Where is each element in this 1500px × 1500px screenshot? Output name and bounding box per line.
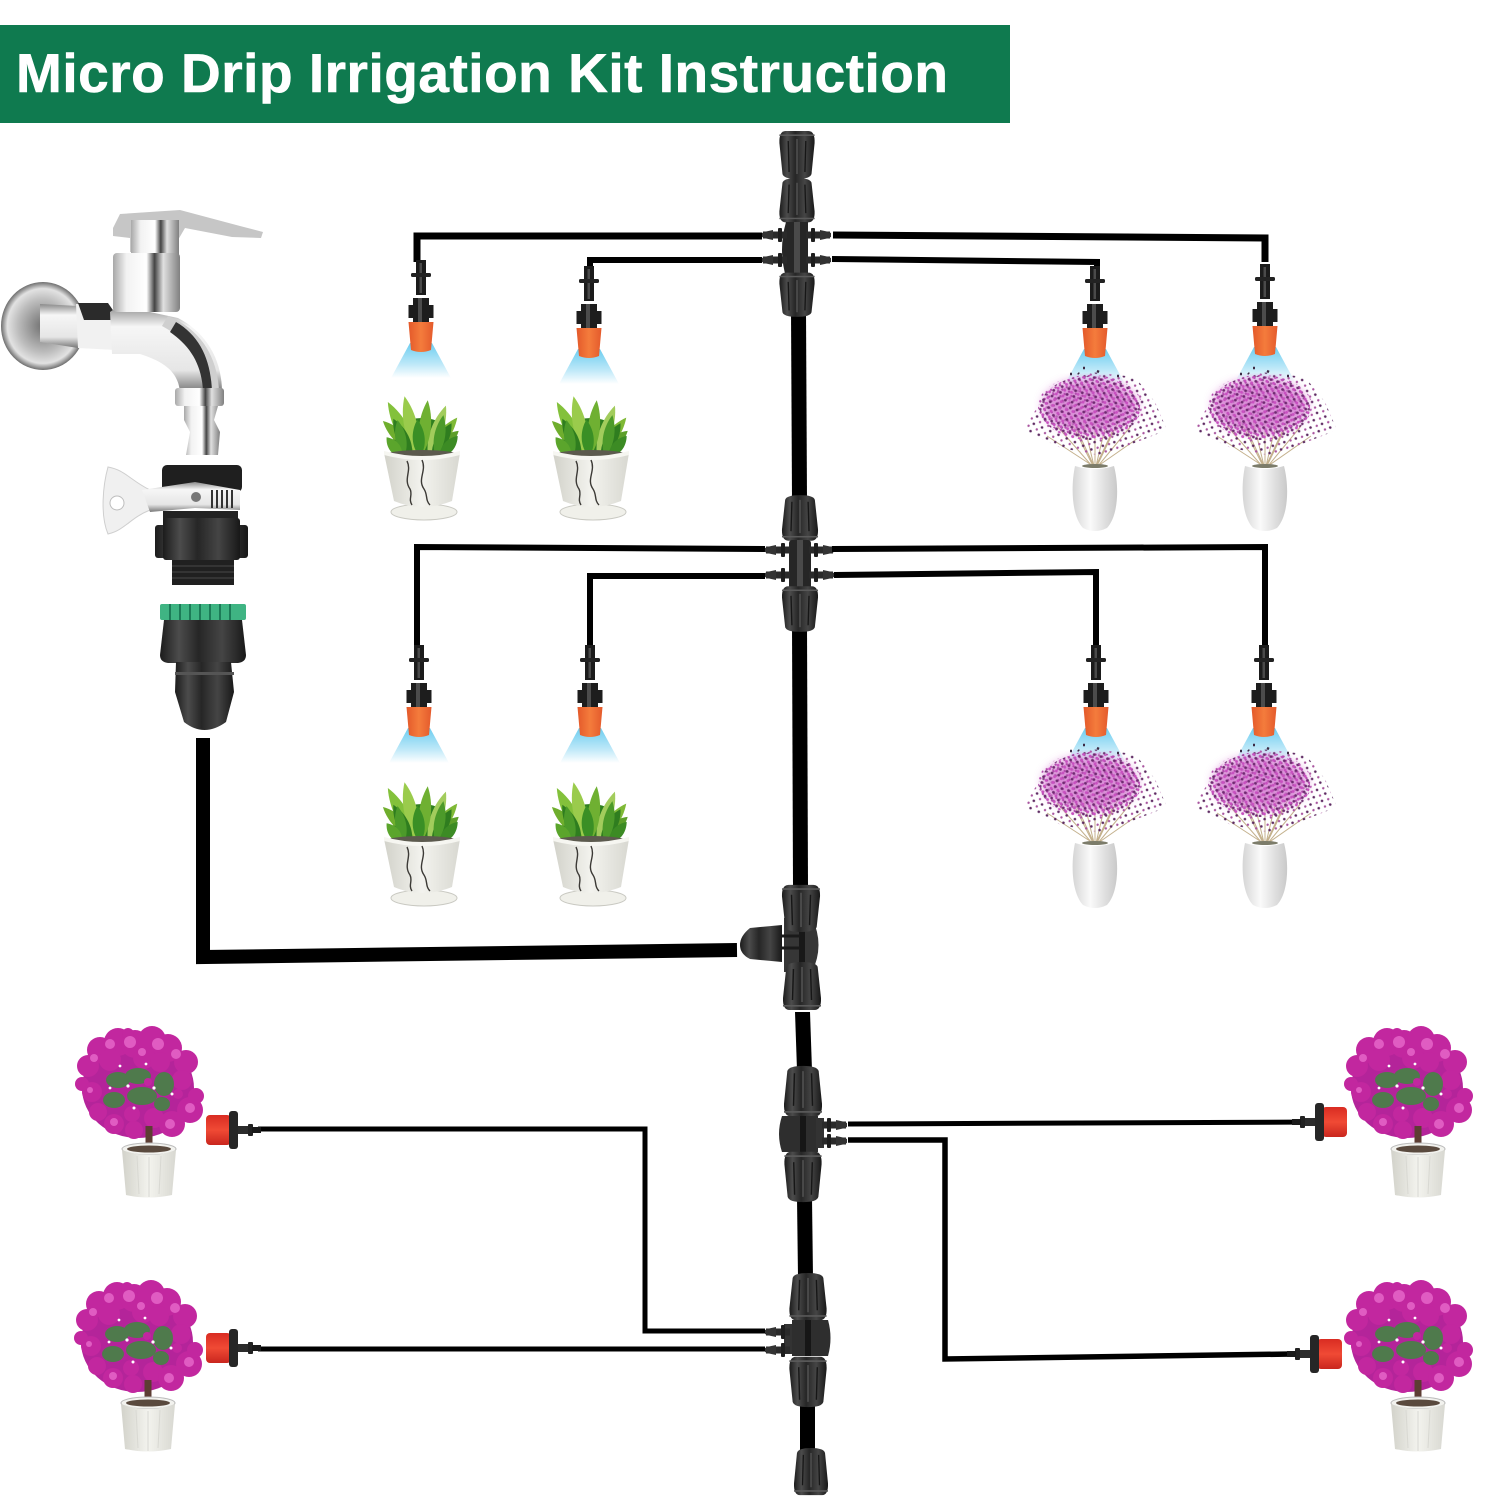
- faucet: [1, 210, 263, 455]
- sprayers and gypsophila vases, row 2 right: [1023, 645, 1337, 908]
- branch tubes: row 1: [417, 235, 1265, 268]
- tee: lower right drip fitting: [779, 1066, 847, 1202]
- tee: second spray branch fitting: [765, 495, 834, 632]
- bougainvillea with dripper, top left: [75, 1026, 261, 1198]
- bougainvillea with dripper, bottom left: [74, 1280, 261, 1452]
- green-ring tube connector: [160, 604, 246, 730]
- hose adapter with clamp and key: [103, 465, 248, 585]
- tee: lower left drip fitting: [765, 1273, 830, 1407]
- connector: bottom end cap: [794, 1448, 828, 1495]
- T-connector joining feed tube: [740, 885, 821, 1010]
- main feed tube from tap to tee: [203, 738, 737, 957]
- title banner: [0, 25, 1010, 123]
- sprayers and gypsophila vases, row 1 right: [1023, 264, 1337, 531]
- connector: top end cap: [779, 131, 815, 179]
- bougainvillea with dripper, bottom right: [1287, 1280, 1473, 1452]
- sprayers and potted succulents, row 1 left: [379, 260, 632, 520]
- drip branch tubes: [258, 1122, 1316, 1359]
- branch tubes: row 2: [417, 547, 1265, 650]
- tee: first spray branch fitting: [762, 178, 831, 317]
- title banner: Micro Drip Irrigation Kit Instruction: [16, 42, 948, 104]
- bougainvillea with dripper, top right: [1292, 1026, 1473, 1198]
- sprayers and potted succulents, row 2 left: [379, 645, 632, 906]
- main vertical tube segments: [791, 310, 815, 1452]
